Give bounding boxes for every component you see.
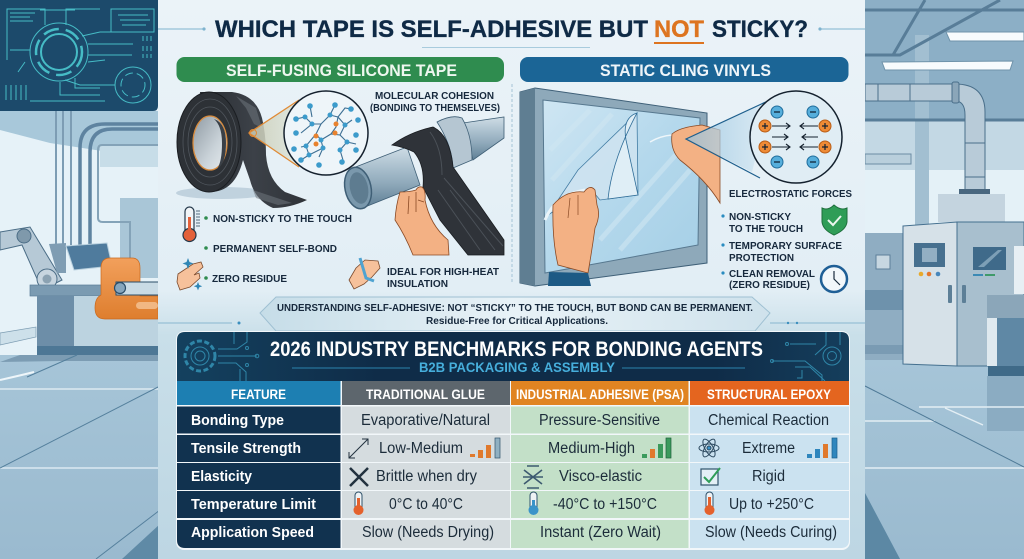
- column header: feature: FEATURE: [231, 387, 286, 402]
- bullet: clean removal: (ZERO RESIDUE): [729, 279, 810, 291]
- right floor: [865, 360, 1024, 559]
- row label column: Application Speed: [191, 525, 314, 541]
- icon: checkbox: [701, 468, 720, 485]
- main panel: [158, 0, 865, 559]
- bullet: clean removal: [721, 268, 816, 291]
- row label column: Temperature Limit: [191, 497, 316, 513]
- heading: static cling vinyls: STATIC CLING VINYLS: [600, 62, 771, 80]
- left pipe section: [353, 147, 420, 207]
- icon: signal bars green: [642, 438, 671, 458]
- bullet: temporary surface protection: PROTECTION: [729, 252, 794, 264]
- icon: signal bars blue: [807, 438, 837, 458]
- illustration: window with peeling film and hands: [520, 88, 720, 286]
- column header: structural epoxy: STRUCTURAL EPOXY: [707, 387, 831, 402]
- right ceiling and wall: [865, 0, 1024, 233]
- text: molecular cohesion: (BONDING TO THEMSELVES): [370, 102, 500, 114]
- illustration: pipe wrapped with tape and hand: [341, 117, 504, 255]
- column: industrial adhesive: Instant (Zero Wait): [540, 524, 661, 541]
- left dashboard screen: [0, 0, 158, 111]
- column: structural epoxy: [690, 406, 849, 548]
- column: traditional glue: Low-Medium: [379, 440, 463, 457]
- tape wrap and tail: [392, 127, 504, 255]
- column: traditional glue: Evaporative/Natural: [361, 412, 490, 429]
- text: ideal for high-heat insulation: INSULATION: [387, 278, 448, 290]
- icon: gear and circuit: [185, 332, 259, 381]
- icon: tape roll: [176, 92, 307, 208]
- hand: [395, 187, 449, 255]
- table header banner: 2026 INDUSTRY BENCHMARKS FOR BONDING AGENTS: [270, 338, 763, 361]
- plus charges: [759, 120, 831, 153]
- icon: brittle cross: [350, 468, 368, 486]
- right background machinery: [865, 233, 905, 363]
- left orange conveyor machine: [95, 258, 160, 319]
- column header: feature: [177, 381, 340, 405]
- column header: industrial adhesive: INDUSTRIAL ADHESIVE (PSA): [516, 387, 684, 402]
- text: electrostatic forces: ELECTROSTATIC FORCES: [729, 188, 852, 200]
- text: molecular cohesion: MOLECULAR COHESION: [375, 90, 494, 102]
- bullet: non-sticky to the touch: NON-STICKY: [729, 211, 791, 223]
- heading: self-fusing silicone tape: SELF-FUSING SILICONE TAPE: [226, 62, 457, 80]
- panel: static cling vinyls: [520, 57, 852, 292]
- column: traditional glue: Brittle when dry: [376, 468, 477, 485]
- icon: thermometer: [183, 207, 200, 242]
- column: industrial adhesive: -40°C to +150°C: [553, 496, 657, 513]
- bullet: temporary surface protection: TEMPORARY SURFACE: [729, 240, 842, 252]
- bullet: permanent self-bond: PERMANENT SELF-BOND: [213, 243, 337, 255]
- column: structural epoxy: Rigid: [752, 468, 785, 485]
- icon: right circuit: [770, 332, 841, 381]
- bullet: non-sticky to the touch: [721, 211, 803, 235]
- icon: atom: [699, 437, 719, 459]
- column: industrial adhesive: Visco-elastic: [559, 468, 642, 485]
- column: structural epoxy: Slow (Needs Curing): [705, 524, 837, 541]
- callout: understanding self-adhesive: [158, 297, 865, 331]
- table header banner: [177, 332, 849, 381]
- callout: understanding self-adhesive: UNDERSTANDING SELF-ADHESIVE: NOT “STICKY” TO THE TOUCH, BUT BOND CAN BE PERMANENT.: [277, 302, 753, 314]
- bullet: zero residue: ZERO RESIDUE: [212, 273, 287, 285]
- column: industrial adhesive: Medium-High: [548, 440, 635, 457]
- icon: thermometer orange: [704, 492, 714, 515]
- title: NOT: [654, 16, 704, 43]
- left floor: [0, 355, 160, 559]
- heading: static cling vinyls: [520, 57, 848, 82]
- column: industrial adhesive: [511, 406, 688, 548]
- bullet: non-sticky to the touch: NON-STICKY TO THE TOUCH: [213, 213, 352, 225]
- icon: clean hand: [177, 258, 203, 290]
- column header: industrial adhesive: [511, 381, 688, 405]
- title: [158, 16, 865, 48]
- column: structural epoxy: Up to +250°C: [729, 496, 814, 513]
- icon: thermometer blue: [528, 492, 538, 515]
- right control cabinet: [903, 222, 1024, 376]
- right duct pipe: [865, 82, 1005, 222]
- bullet: clean removal: CLEAN REMOVAL: [729, 268, 816, 280]
- column: traditional glue: 0°C to 40°C: [389, 496, 463, 513]
- row label column: [177, 406, 340, 548]
- panel: self-fusing silicone tape: [176, 57, 504, 290]
- text: ideal for high-heat insulation: [387, 266, 500, 290]
- column header: traditional glue: TRADITIONAL GLUE: [366, 387, 485, 402]
- bullet: non-sticky to the touch: TO THE TOUCH: [729, 223, 803, 235]
- bullet: temporary surface protection: [721, 240, 842, 264]
- text: ideal for high-heat insulation: IDEAL FOR HIGH-HEAT: [387, 266, 500, 278]
- attraction arrows: [772, 123, 818, 150]
- right pipe section: [463, 117, 504, 160]
- column: structural epoxy: Chemical Reaction: [708, 412, 829, 429]
- left robot arm and bench: [0, 227, 158, 355]
- icon: green shield: [822, 205, 847, 235]
- column: structural epoxy: Extreme: [742, 440, 795, 457]
- icon: visco-elastic: [523, 466, 543, 488]
- panel: benchmark table: [176, 331, 850, 550]
- zoom circle: molecular structure: [249, 91, 368, 175]
- row label column: Bonding Type: [191, 413, 284, 429]
- table header banner: B2B PACKAGING & ASSEMBLY: [419, 360, 615, 375]
- icon: wrapped hand: [349, 258, 380, 289]
- icon: signal bars orange: [470, 438, 500, 458]
- icon: thermometer red: [354, 492, 364, 515]
- icon: tensile arrows: [349, 439, 368, 458]
- title: WHICH TAPE IS SELF-ADHESIVE BUT: [215, 16, 648, 43]
- zoom circle: electrostatic charges: [686, 91, 842, 183]
- column header: traditional glue: [342, 381, 510, 405]
- left ceiling and wall: [0, 111, 160, 278]
- heading: self-fusing silicone tape: [176, 57, 504, 82]
- column header: structural epoxy: [690, 381, 849, 405]
- text: molecular cohesion: [370, 90, 500, 114]
- title: STICKY?: [712, 16, 808, 43]
- column: industrial adhesive: Pressure-Sensitive: [539, 412, 660, 429]
- minus charges: [771, 106, 819, 168]
- icon: clock: [821, 266, 847, 292]
- callout: understanding self-adhesive: Residue-Free for Critical Applications.: [426, 315, 608, 327]
- row label column: Tensile Strength: [191, 441, 301, 457]
- column: traditional glue: [342, 406, 510, 548]
- row label column: Elasticity: [191, 469, 252, 485]
- column: traditional glue: Slow (Needs Drying): [362, 524, 494, 541]
